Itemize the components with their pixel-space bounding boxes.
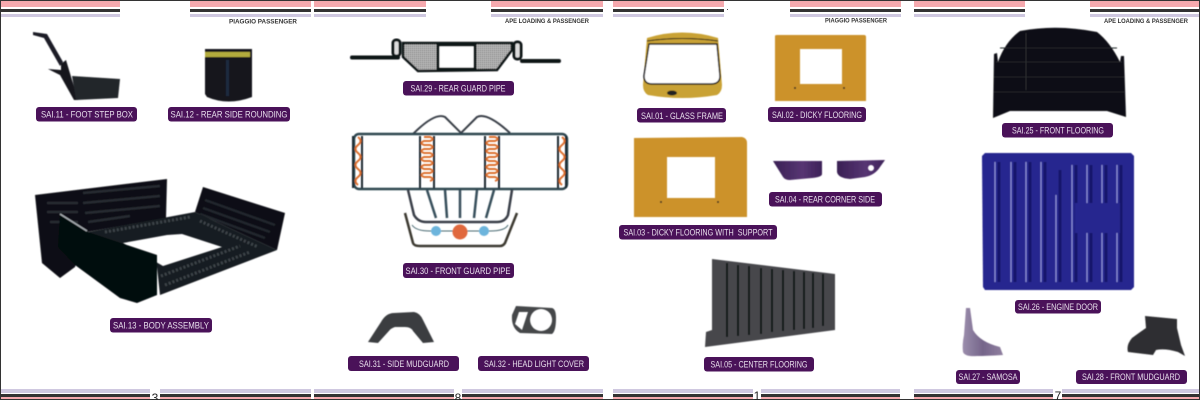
label: SAI.26: SAI.26 - ENGINE DOOR	[1018, 302, 1098, 312]
footer stripes	[314, 389, 603, 399]
icon: engine door	[982, 153, 1134, 290]
label: SAI.27: SAI.27 - SAMOSA	[958, 372, 1018, 382]
panel: page 1 piaggio passenger	[613, 1, 901, 400]
panel: page 3 piaggio passenger	[1, 1, 311, 400]
label: SAI.26	[1015, 300, 1101, 314]
label: SAI.12: SAI.12 - REAR SIDE ROUNDING	[170, 110, 288, 120]
label: SAI.04: SAI.04 - REAR CORNER SIDE	[775, 194, 875, 204]
footer stripes	[613, 389, 900, 399]
label: SAI.32: SAI.32 - HEAD LIGHT COVER	[484, 359, 584, 369]
header stripes	[1, 1, 311, 17]
label: SAI.32	[478, 356, 589, 371]
icon: center flooring	[705, 259, 835, 347]
label: SAI.28: SAI.28 - FRONT MUDGUARD	[1082, 372, 1180, 382]
label: SAI.29: SAI.29 - REAR GUARD PIPE	[410, 84, 506, 94]
label: SAI.01	[637, 108, 726, 122]
header stripes	[314, 1, 603, 17]
icon: rear side rounding	[205, 49, 252, 102]
label: SAI.31: SAI.31 - SIDE MUDGUARD	[359, 359, 449, 369]
icon: foot step box	[33, 32, 120, 100]
label: SAI.29	[403, 81, 514, 96]
label: SAI.04	[769, 192, 882, 206]
label: SAI.03	[619, 225, 777, 240]
icon: dicky flooring with support	[634, 137, 747, 217]
heading: PIAGGIO PASSENGER	[229, 18, 297, 26]
label: SAI.25: SAI.25 - FRONT FLOORING	[1012, 126, 1104, 136]
label: SAI.02: SAI.02 - DICKY FLOORING	[772, 110, 862, 120]
icon: dicky flooring	[775, 35, 866, 101]
icon: head light cover	[512, 306, 556, 334]
label: SAI.05: SAI.05 - CENTER FLOORING	[710, 360, 808, 370]
label: SAI.01: SAI.01 - GLASS FRAME	[641, 111, 723, 121]
icon: rear corner side	[773, 160, 885, 180]
icon: front mudguard	[1128, 316, 1185, 356]
label: SAI.30: SAI.30 - FRONT GUARD PIPE	[406, 266, 510, 276]
icon: glass frame	[643, 32, 722, 98]
label: SAI.27	[956, 370, 1020, 384]
heading: PIAGGIO PASSENGER	[825, 18, 887, 24]
icon: front flooring	[993, 28, 1126, 118]
label: SAI.30	[403, 263, 514, 278]
icon: side mudguard	[368, 312, 434, 343]
label: SAI.11: SAI.11 - FOOT STEP BOX	[41, 110, 133, 120]
icon: front guard pipe	[353, 116, 567, 246]
header stripes	[613, 1, 901, 17]
header stripes	[914, 1, 1199, 17]
heading: APE LOADING & PASSENGER	[1104, 18, 1188, 25]
footer stripes	[914, 389, 1199, 399]
label: SAI.13: SAI.13 - BODY ASSEMBLY	[113, 320, 209, 330]
footer stripes	[1, 389, 311, 399]
label: SAI.13	[110, 318, 212, 332]
icon: samosa	[963, 308, 1003, 356]
icon: rear guard pipe	[352, 40, 559, 71]
icon: body assembly	[35, 179, 285, 303]
label: SAI.11	[36, 107, 137, 122]
label: SAI.28	[1076, 370, 1187, 384]
panel: page 8 ape loading and passenger	[314, 1, 603, 400]
panel: page 7 ape loading and passenger	[914, 1, 1199, 400]
label: SAI.05	[704, 357, 814, 372]
label: SAI.31	[348, 356, 459, 371]
heading: APE LOADING & PASSENGER	[505, 18, 589, 25]
label: SAI.25	[1002, 123, 1113, 138]
label: SAI.03: SAI.03 - DICKY FLOORING WITH SUPPORT	[624, 228, 773, 238]
label: SAI.12	[168, 107, 290, 122]
label: SAI.02	[768, 107, 866, 122]
